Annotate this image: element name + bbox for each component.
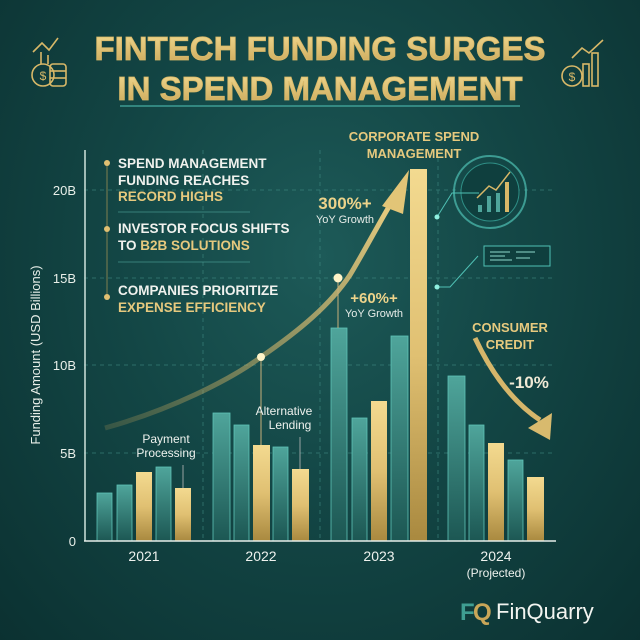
x axis labels: 2022	[245, 548, 277, 564]
label: payment processing	[136, 432, 196, 488]
label: 300% growth	[316, 194, 374, 226]
y tick labels: 20B	[53, 183, 76, 198]
label: alternative lending: Alternative	[256, 404, 313, 418]
logo: FinQuarry: Q	[473, 599, 492, 626]
title	[94, 30, 546, 107]
y tick labels: 5B	[60, 446, 76, 461]
icon: coin and chart right: $	[569, 70, 576, 84]
arrow: decline	[475, 338, 552, 440]
text block: key points: COMPANIES PRIORITIZE	[118, 283, 278, 298]
title: IN SPEND MANAGEMENT	[117, 70, 523, 107]
label: corporate spend management	[349, 129, 479, 161]
logo: FinQuarry: FinQuarry	[496, 599, 594, 624]
title: FINTECH FUNDING SURGES	[94, 30, 546, 67]
label: alternative lending	[256, 404, 313, 469]
text block: key points: RECORD HIGHS	[118, 189, 223, 204]
label: corporate spend management: CORPORATE SPEND	[349, 129, 479, 144]
text block: key points: SPEND MANAGEMENT	[118, 156, 267, 171]
label: -10%: -10%	[509, 373, 549, 392]
x axis labels: 2021	[128, 548, 160, 564]
label: payment processing: Payment	[142, 432, 190, 446]
label: 60% growth: +60%+	[350, 290, 398, 307]
label: 300% growth: YoY Growth	[316, 214, 374, 226]
y axis label: Funding Amount (USD Billions)	[28, 265, 43, 445]
arrow: growth curve	[105, 170, 409, 445]
y tick labels: 0	[69, 534, 76, 549]
x axis labels: 2023	[363, 548, 395, 564]
y tick labels	[53, 183, 76, 549]
label: consumer credit: CREDIT	[486, 337, 534, 352]
label: 300% growth: 300%+	[318, 194, 372, 213]
label: payment processing: Processing	[136, 446, 196, 460]
label: consumer credit: CONSUMER	[472, 320, 549, 335]
logo: FinQuarry: F	[460, 599, 475, 626]
text block: key points: TO B2B SOLUTIONS	[118, 238, 250, 253]
x axis labels: 2024	[480, 548, 512, 564]
icon: coins and chart left: $	[40, 69, 47, 83]
bar chart	[97, 169, 544, 541]
label: 60% growth: YoY Growth	[345, 308, 403, 320]
y tick labels: 10B	[53, 358, 76, 373]
icon: data panel	[434, 246, 550, 290]
label: 60% growth	[345, 290, 403, 320]
label: consumer credit	[472, 320, 549, 352]
label: alternative lending: Lending	[269, 418, 311, 432]
icon: chart circle	[434, 156, 526, 228]
text block: key points	[104, 156, 290, 315]
label: corporate spend management: MANAGEMENT	[367, 146, 461, 161]
logo: FinQuarry	[460, 599, 594, 626]
x axis labels	[128, 548, 525, 580]
text block: key points: INVESTOR FOCUS SHIFTS	[118, 221, 290, 236]
x axis labels: (Projected)	[467, 566, 525, 580]
y tick labels: 15B	[53, 271, 76, 286]
icon: coins and chart left	[32, 38, 66, 86]
text block: key points: EXPENSE EFFICIENCY	[118, 300, 266, 315]
text block: key points: FUNDING REACHES	[118, 173, 249, 188]
icon: coin and chart right	[562, 40, 603, 86]
